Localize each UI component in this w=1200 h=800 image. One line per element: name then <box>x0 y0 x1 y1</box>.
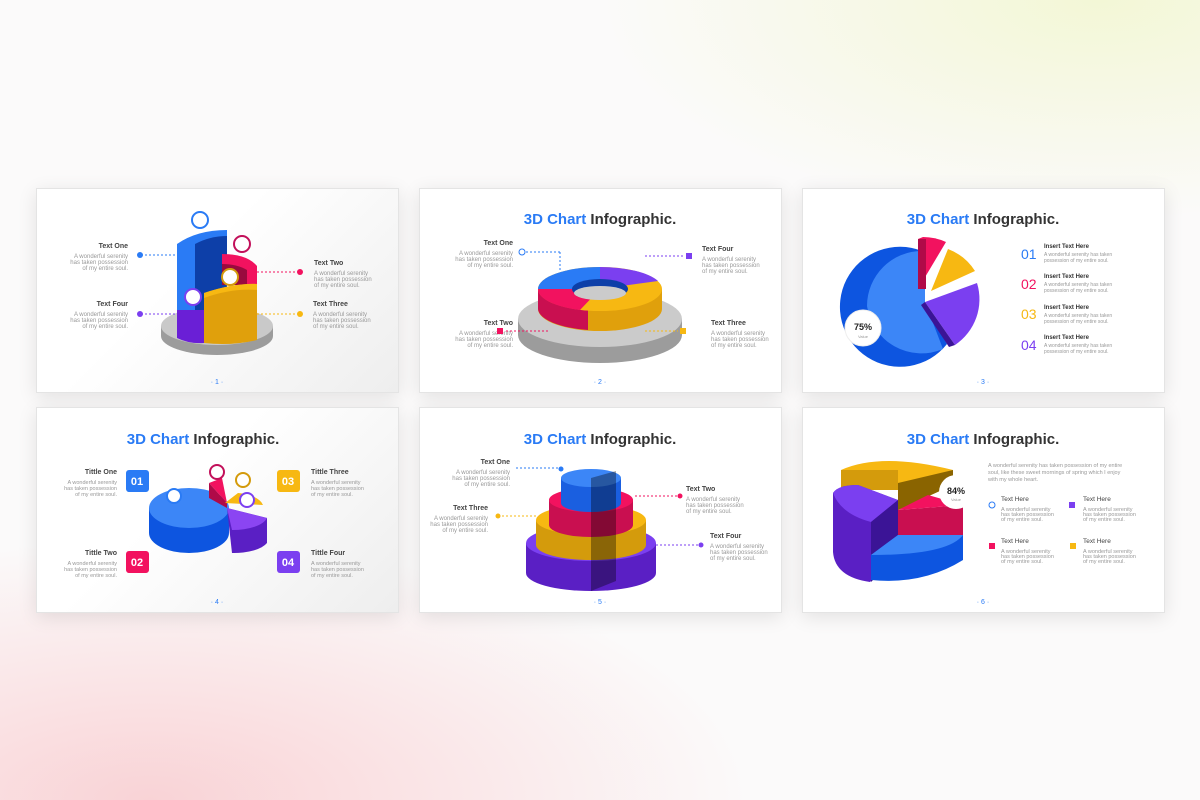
title: 3D Chart Infographic. <box>907 211 1059 228</box>
number boxes and labels: Tittle One <box>85 469 117 476</box>
list: possession of my entire soul. <box>1044 258 1108 264</box>
list: 04 <box>1021 337 1037 353</box>
labels: of my entire soul. <box>313 324 359 330</box>
labels: of my entire soul. <box>464 482 510 488</box>
number boxes and labels: A wonderful serenity <box>67 561 117 567</box>
labels: A wonderful serenity <box>456 470 510 476</box>
list: 03 <box>1021 306 1037 322</box>
labels: A wonderful serenity <box>459 251 513 257</box>
labels: A wonderful serenity <box>74 312 128 318</box>
labels: has taken possession <box>455 337 513 343</box>
panel: slide 5 <box>419 407 782 613</box>
paragraph and grid: Text Here <box>1001 496 1029 503</box>
labels: A wonderful serenity <box>434 516 488 522</box>
chart: 3D layered cylinder <box>161 230 273 355</box>
labels: A wonderful serenity <box>314 271 368 277</box>
labels: Text Three <box>313 301 348 308</box>
number boxes and labels: has taken possession <box>311 486 364 492</box>
paragraph and grid: Text Here <box>1083 538 1111 545</box>
callout: 75% value: Value <box>858 334 869 339</box>
list: possession of my entire soul. <box>1044 288 1108 294</box>
title: 3D Chart Infographic. <box>524 211 676 228</box>
number boxes and labels: Tittle Three <box>311 469 349 476</box>
labels: has taken possession <box>313 318 371 324</box>
paragraph and grid: Text Here <box>1001 538 1029 545</box>
number boxes and labels: A wonderful serenity <box>311 561 361 567</box>
number boxes and labels: A wonderful serenity <box>311 480 361 486</box>
labels: A wonderful serenity <box>313 312 367 318</box>
labels: of my entire soul. <box>82 266 128 272</box>
list: 02 <box>1021 276 1037 292</box>
chart: 3D donut <box>518 267 682 363</box>
paragraph and grid: of my entire soul. <box>1001 559 1043 565</box>
labels: Text One <box>481 459 510 466</box>
labels: · 1 · <box>211 379 223 386</box>
panel: slide 1 <box>36 188 399 393</box>
paragraph and grid: A wonderful serenity has taken possession of my entire <box>988 463 1122 469</box>
list: A wonderful serenity has taken <box>1044 282 1112 288</box>
paragraph and grid: of my entire soul. <box>1083 517 1125 523</box>
labels: of my entire soul. <box>467 343 513 349</box>
paragraph and grid: has taken possession <box>1001 512 1054 518</box>
number boxes and labels: of my entire soul. <box>75 492 117 498</box>
icons: pins <box>167 465 254 507</box>
labels: has taken possession <box>711 337 769 343</box>
paragraph and grid: A wonderful serenity <box>1001 507 1051 513</box>
paragraph and grid: has taken possession <box>1083 512 1136 518</box>
labels: A wonderful serenity <box>459 331 513 337</box>
labels: has taken possession <box>70 260 128 266</box>
panel: slide 6 <box>802 407 1165 613</box>
labels <box>70 243 372 386</box>
number boxes and labels: 01 <box>131 476 143 488</box>
paragraph and grid: has taken possession <box>1001 554 1054 560</box>
paragraph and grid: has taken possession <box>1083 554 1136 560</box>
list: · 3 · <box>977 379 989 386</box>
paragraph and grid: · 6 · <box>977 599 989 606</box>
labels: has taken possession <box>314 277 372 283</box>
labels: Text Four <box>97 301 128 308</box>
title: 3D Chart Infographic. <box>907 431 1059 448</box>
list: Insert Text Here <box>1044 335 1090 341</box>
labels: Text Two <box>686 486 715 493</box>
number boxes and labels: has taken possession <box>311 567 364 573</box>
number boxes and labels: A wonderful serenity <box>67 480 117 486</box>
labels: A wonderful serenity <box>711 331 765 337</box>
paragraph and grid: Text Here <box>1083 496 1111 503</box>
paragraph and grid <box>977 463 1136 606</box>
list: A wonderful serenity has taken <box>1044 252 1112 258</box>
paragraph and grid: of my entire soul. <box>1001 517 1043 523</box>
panel: slide 2 <box>419 188 782 393</box>
number boxes and labels: of my entire soul. <box>311 573 353 579</box>
labels: Text Four <box>710 533 742 540</box>
callout: 75% value: 75% <box>854 322 872 332</box>
number boxes and labels: Tittle Two <box>85 550 117 557</box>
labels: A wonderful serenity <box>710 544 764 550</box>
labels <box>430 459 768 606</box>
title: 3D Chart Infographic. <box>524 431 676 448</box>
labels: has taken possession <box>710 550 768 556</box>
labels: of my entire soul. <box>702 269 748 275</box>
labels: of my entire soul. <box>442 528 488 534</box>
paragraph and grid: soul, like these sweet mornings of spring which I enjoy <box>988 470 1121 476</box>
labels: of my entire soul. <box>467 263 513 269</box>
labels: has taken possession <box>702 263 760 269</box>
labels: of my entire soul. <box>82 324 128 330</box>
list <box>977 244 1112 386</box>
labels: · 5 · <box>594 599 606 606</box>
list: possession of my entire soul. <box>1044 319 1108 325</box>
labels: · 2 · <box>594 379 606 386</box>
number boxes and labels: 02 <box>131 557 143 569</box>
number boxes and labels: 03 <box>282 476 294 488</box>
chart: pie with raised slices <box>149 478 267 553</box>
labels: Text Three <box>711 320 746 327</box>
list: Insert Text Here <box>1044 305 1090 311</box>
icons: pins <box>185 212 250 305</box>
number boxes and labels: Tittle Four <box>311 550 345 557</box>
panel: slide 4 <box>36 407 399 613</box>
labels: has taken possession <box>452 476 510 482</box>
labels <box>455 240 769 386</box>
labels: Text Four <box>702 246 734 253</box>
labels: Text One <box>99 243 128 250</box>
labels: has taken possession <box>686 503 744 509</box>
number boxes and labels: 04 <box>282 557 295 569</box>
labels: Text Three <box>453 505 488 512</box>
list: Insert Text Here <box>1044 274 1090 280</box>
list: Insert Text Here <box>1044 244 1090 250</box>
labels: A wonderful serenity <box>702 257 756 263</box>
chart: 3D cylinder pie <box>833 461 963 582</box>
chart: stacked tiers <box>526 469 656 591</box>
labels: of my entire soul. <box>686 509 732 515</box>
paragraph and grid: A wonderful serenity <box>1083 549 1133 555</box>
labels: of my entire soul. <box>314 283 360 289</box>
number boxes and labels: of my entire soul. <box>75 573 117 579</box>
panel: slide 3 <box>802 188 1165 393</box>
list: possession of my entire soul. <box>1044 349 1108 355</box>
callout: 75% value <box>845 310 881 346</box>
list: A wonderful serenity has taken <box>1044 313 1112 319</box>
labels: has taken possession <box>430 522 488 528</box>
labels: A wonderful serenity <box>74 254 128 260</box>
list: A wonderful serenity has taken <box>1044 343 1112 349</box>
callout: 84% value: Value <box>951 497 962 502</box>
labels: Text Two <box>314 260 343 267</box>
chart: exploded pie <box>840 237 979 367</box>
number boxes and labels: has taken possession <box>64 567 117 573</box>
number boxes and labels <box>64 469 364 606</box>
title: 3D Chart Infographic. <box>127 431 279 448</box>
number boxes and labels: has taken possession <box>64 486 117 492</box>
labels: has taken possession <box>455 257 513 263</box>
paragraph and grid: with my whole heart. <box>987 477 1039 483</box>
labels: of my entire soul. <box>710 556 756 562</box>
paragraph and grid: of my entire soul. <box>1083 559 1125 565</box>
number boxes and labels: of my entire soul. <box>311 492 353 498</box>
labels: Text Two <box>484 320 513 327</box>
paragraph and grid: A wonderful serenity <box>1001 549 1051 555</box>
callout: 84% value: 84% <box>947 486 965 496</box>
callout: 84% value <box>939 475 973 509</box>
labels: A wonderful serenity <box>686 497 740 503</box>
labels: Text One <box>484 240 513 247</box>
list: 01 <box>1021 246 1037 262</box>
labels: of my entire soul. <box>711 343 757 349</box>
number boxes and labels: · 4 · <box>211 599 223 606</box>
paragraph and grid: A wonderful serenity <box>1083 507 1133 513</box>
labels: has taken possession <box>70 318 128 324</box>
